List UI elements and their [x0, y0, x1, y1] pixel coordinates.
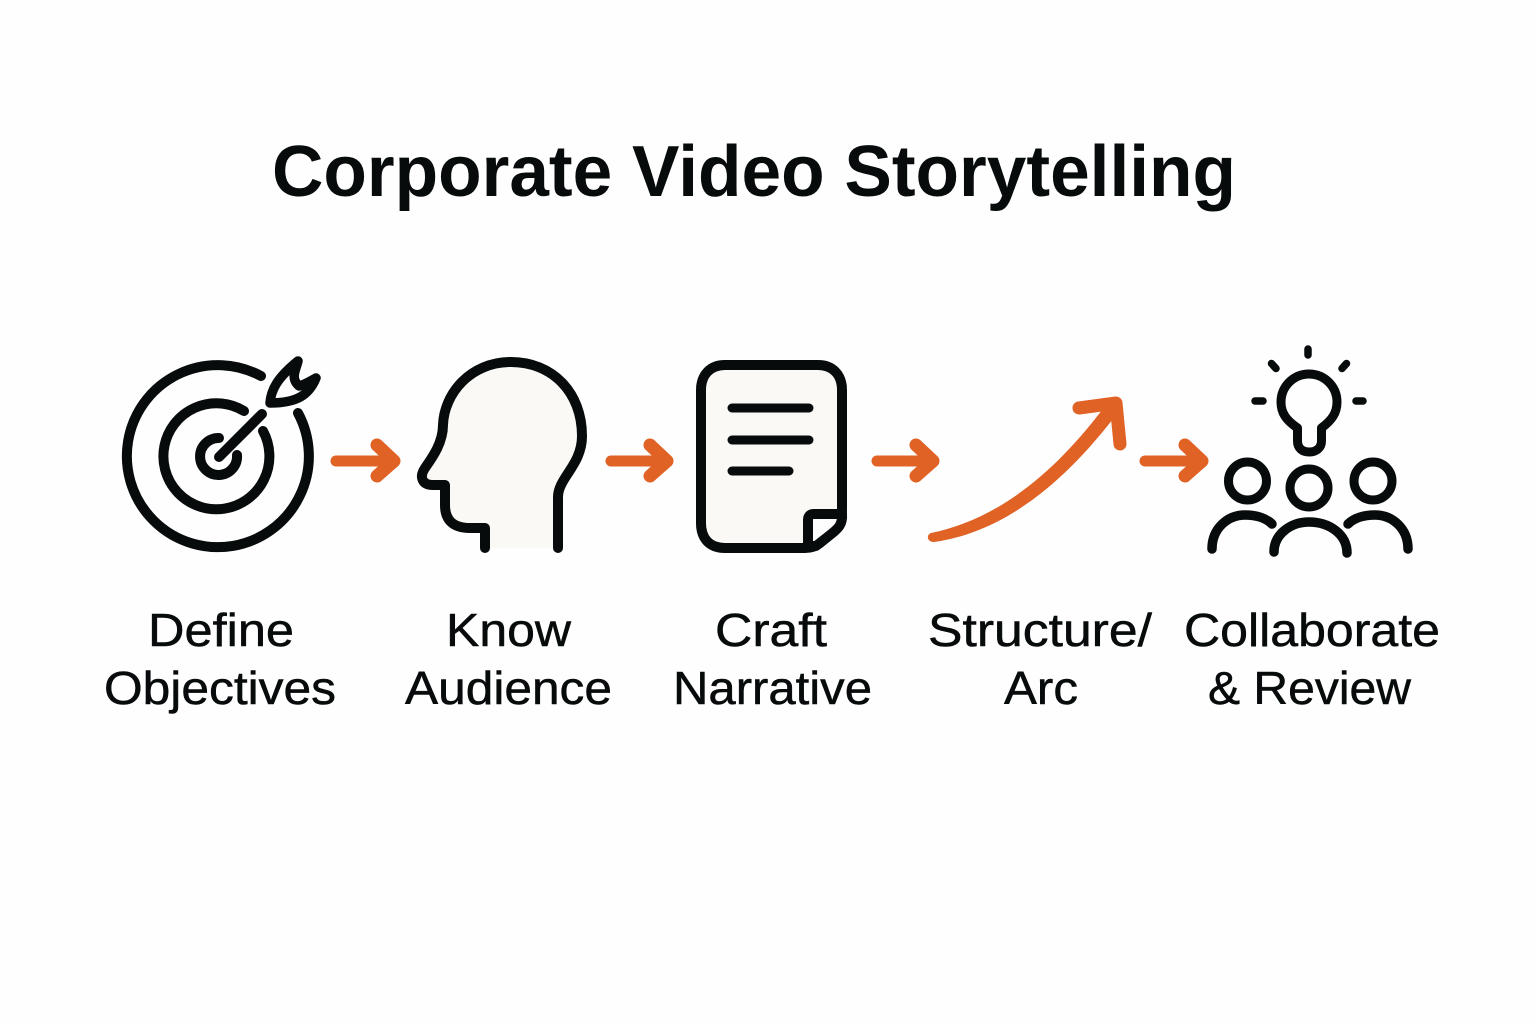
- icon: team of three: [1212, 462, 1408, 553]
- label: Define Objectives: Objectives: [104, 662, 336, 714]
- icon: document: [701, 365, 842, 548]
- label: Know Audience: Audience: [405, 662, 612, 714]
- arrow: rising story arc: [928, 402, 1120, 542]
- arrow: objectives to audience: [336, 445, 394, 476]
- arrow: narrative to structure: [877, 445, 933, 476]
- label: Structure/Arc: Arc: [1004, 662, 1078, 714]
- icon: lightbulb: [1255, 349, 1363, 452]
- label: Know Audience: [405, 604, 612, 714]
- label: Know Audience: Know: [446, 604, 572, 656]
- label: Collaborate & Review: & Review: [1208, 662, 1412, 714]
- arrow: audience to narrative: [611, 445, 667, 476]
- label: Collaborate & Review: [1184, 604, 1440, 714]
- label: Structure/Arc: [928, 604, 1152, 714]
- label: Structure/Arc: Structure/: [928, 604, 1152, 656]
- icon: head profile: [422, 362, 582, 548]
- label: Collaborate & Review: Collaborate: [1184, 604, 1440, 656]
- icon: lightbulb and team: [1212, 349, 1408, 553]
- icon: target with arrow: [127, 361, 316, 547]
- arrow: structure to collaborate: [1145, 445, 1202, 476]
- label: Craft Narrative: Narrative: [673, 662, 872, 714]
- label: Define Objectives: [104, 604, 336, 714]
- label: Define Objectives: Define: [148, 604, 294, 656]
- label: Craft Narrative: [673, 604, 872, 714]
- label: Craft Narrative: Craft: [715, 604, 827, 656]
- title: Corporate Video Storytelling: [272, 132, 1236, 212]
